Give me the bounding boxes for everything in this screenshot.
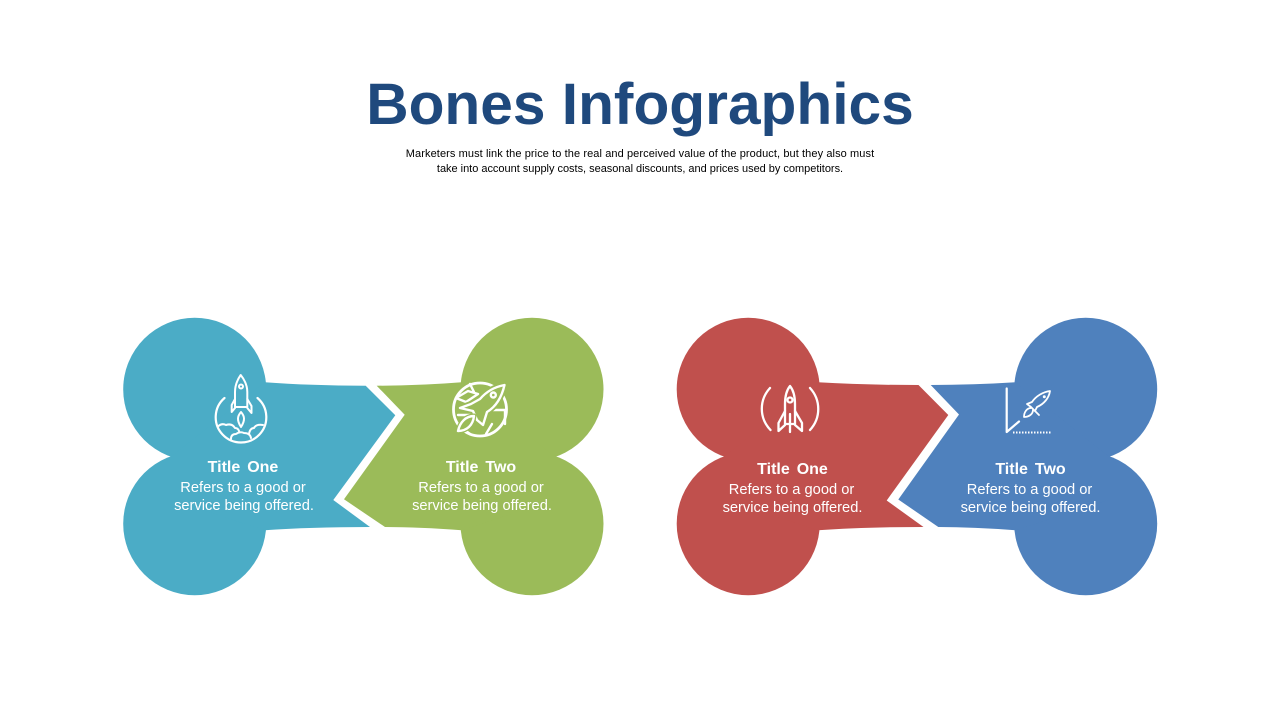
- subtitle text: [406, 148, 874, 175]
- text block: blue title two: [961, 461, 1100, 516]
- icon: rocket launch in circle: [216, 375, 266, 442]
- text block: teal title one: Refers to a good or: [180, 480, 306, 496]
- text block: green title two: Title Two: [446, 459, 516, 476]
- text block: teal title one: service being offered.: [174, 498, 314, 514]
- bone: red left half: [677, 318, 948, 595]
- bone: green right half: [344, 318, 604, 595]
- text block: blue title two: Refers to a good or: [967, 482, 1092, 498]
- bone: teal left half: [123, 318, 395, 595]
- icon: rocket over chart axes: [1007, 388, 1052, 432]
- text block: green title two: [412, 459, 552, 514]
- icon: rocket between brackets: [762, 386, 818, 432]
- text block: red title one: Refers to a good or: [729, 482, 854, 498]
- text block: red title one: [723, 461, 862, 516]
- title: Bones Infographics: [366, 72, 914, 137]
- text block: blue title two: Title Two: [995, 461, 1066, 478]
- text block: red title one: Title One: [757, 461, 828, 478]
- text block: green title two: Refers to a good or: [418, 480, 544, 496]
- text block: red title one: service being offered.: [723, 500, 862, 516]
- icon: rocket over globe: [454, 383, 506, 436]
- text block: teal title one: [174, 459, 314, 514]
- text block: teal title one: Title One: [208, 459, 278, 476]
- bone: blue right half: [898, 318, 1157, 595]
- subtitle text: take into account supply costs, seasonal discounts, and prices used by competitors.: [437, 163, 843, 175]
- text block: green title two: service being offered.: [412, 498, 552, 514]
- text block: blue title two: service being offered.: [961, 500, 1100, 516]
- subtitle text: Marketers must link the price to the real and perceived value of the product, but they also must: [406, 148, 874, 160]
